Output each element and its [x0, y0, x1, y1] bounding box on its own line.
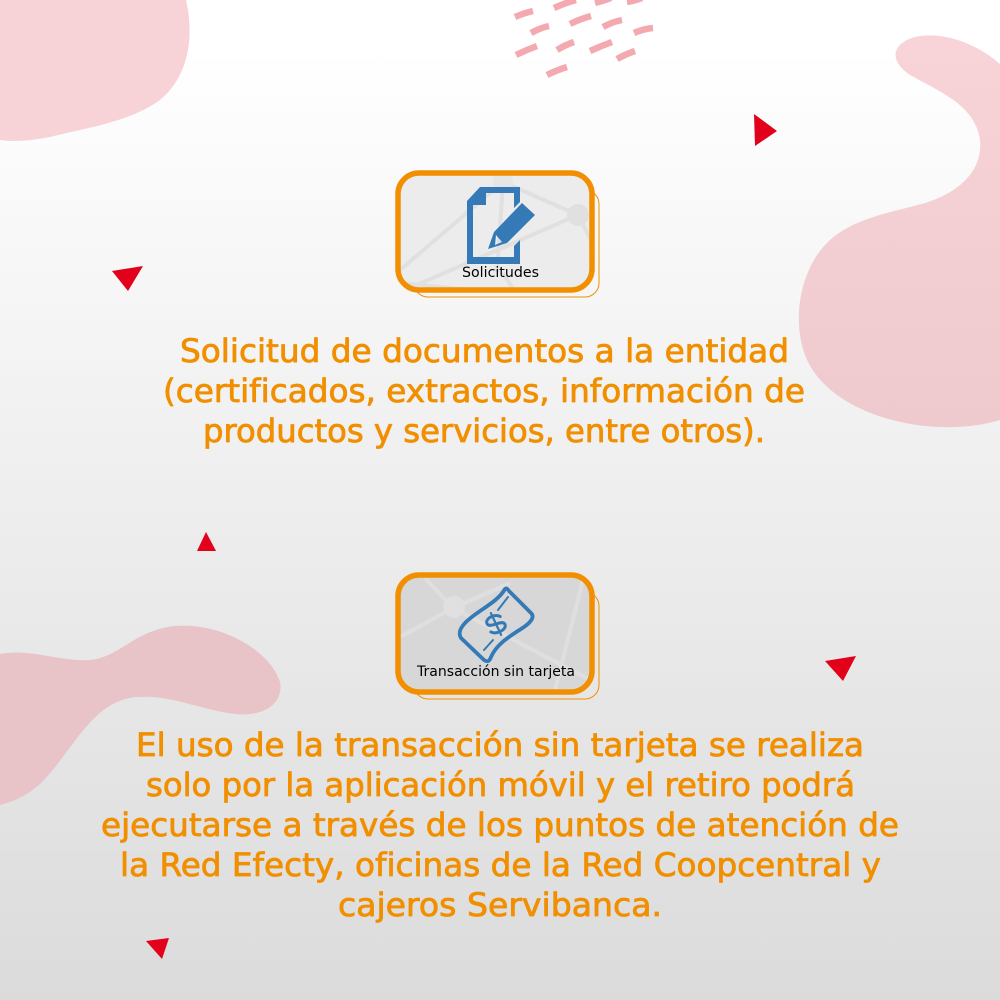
text: second description: El uso de la transacción sin tarjeta se realiza [136, 726, 864, 764]
blob: right [799, 35, 1000, 427]
card border [398, 575, 592, 692]
text: first description [163, 332, 805, 450]
text: second description: cajeros Servibanca. [338, 886, 662, 924]
text: second description: ejecutarse a través de los puntos de atención de [101, 806, 899, 844]
card body [398, 173, 592, 290]
text: second description: solo por la aplicación móvil y el retiro podrá [146, 766, 855, 804]
text: first description: productos y servicios, entre otros). [203, 412, 765, 450]
card: Solicitudes [398, 172, 599, 297]
blob: lower left [0, 626, 280, 805]
card body [398, 575, 592, 692]
card: Transacción sin tarjeta [398, 575, 599, 699]
network pattern [401, 184, 589, 287]
card border [398, 173, 592, 290]
triangle markers [112, 114, 856, 959]
label: Transacción sin tarjeta: Transacción sin tarjeta [416, 664, 575, 680]
text: second description [101, 726, 899, 924]
card back outline [414, 592, 599, 699]
label: Solicitudes: Solicitudes [462, 265, 539, 281]
text: first description: (certificados, extractos, información de [163, 372, 805, 410]
decorative dashes [515, 0, 653, 75]
network pattern [444, 596, 464, 618]
icon: banknote [460, 588, 533, 661]
card back outline [414, 190, 599, 297]
text: first description: Solicitud de documentos a la entidad [180, 332, 789, 370]
blob: top left [0, 0, 190, 141]
text: second description: la Red Efecty, oficinas de la Red Coopcentral y [120, 846, 881, 884]
icon: document with pencil [467, 187, 535, 264]
